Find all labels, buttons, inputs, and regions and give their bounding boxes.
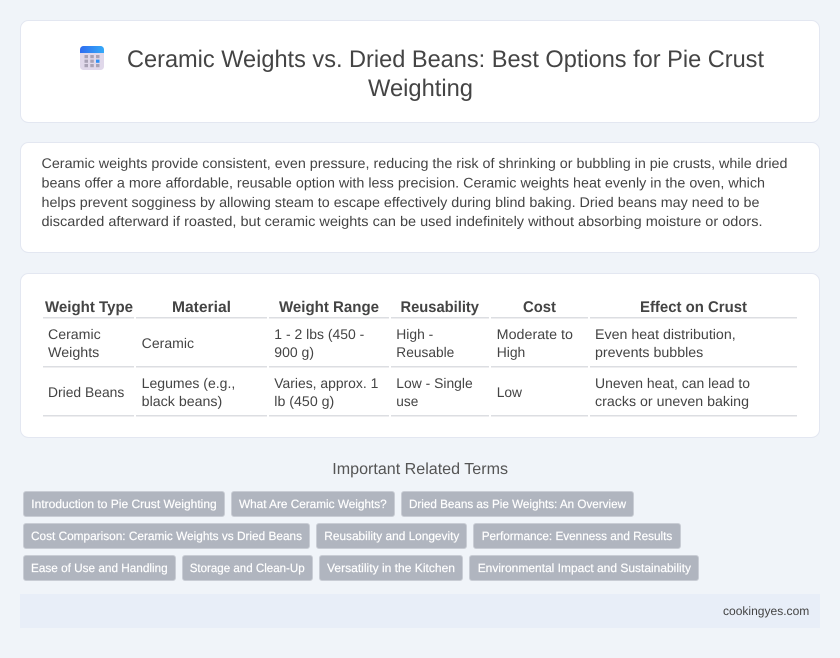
tag: Cost Comparison: Ceramic Weights vs Dried Beans	[31, 529, 302, 543]
title: Weighting	[368, 75, 473, 102]
table row: ceramic weights: Even heat distribution,	[595, 326, 736, 342]
table header row	[45, 299, 747, 316]
tag	[320, 556, 462, 580]
table row: ceramic weights: prevents bubbles	[595, 344, 703, 360]
text block: summary	[42, 155, 788, 229]
tag	[24, 524, 310, 548]
panel: title header	[20, 20, 820, 122]
table header row: Effect on Crust	[640, 299, 747, 316]
table row: dried beans: cracks or uneven baking	[595, 393, 749, 409]
table row: ceramic weights: High -	[396, 326, 434, 342]
tag: Reusability and Longevity	[324, 529, 459, 543]
table row: dried beans: Legumes (e.g.,	[142, 375, 235, 391]
tag: Environmental Impact and Sustainability	[478, 561, 691, 575]
title: Ceramic Weights vs. Dried Beans: Best Options for Pie Crust	[127, 46, 764, 73]
tag: Versatility in the Kitchen	[327, 561, 455, 575]
heading: important related terms: Important Related Terms	[332, 461, 508, 478]
table row: ceramic weights: 1 - 2 lbs (450 -	[274, 326, 365, 342]
text block: summary: beans offer a more affordable, reusable option with less precision. Ceramic weights heat evenly in the oven, which	[42, 174, 765, 190]
table header row: Reusability	[400, 299, 479, 316]
table row: dried beans: Uneven heat, can lead to	[595, 375, 750, 391]
table row: ceramic weights	[48, 326, 736, 360]
title	[127, 46, 764, 102]
footer	[20, 594, 820, 628]
text block: summary: Ceramic weights provide consistent, even pressure, reducing the risk of shrinking or bubbling in pie crusts, while dried	[42, 155, 788, 171]
table row: ceramic weights: Ceramic	[142, 335, 194, 351]
icon: calendar	[80, 46, 104, 70]
tag	[24, 556, 176, 580]
panel: related term tags	[24, 492, 698, 580]
table row: ceramic weights: Weights	[48, 344, 99, 360]
footer: cookingyes.com	[723, 604, 809, 618]
tag	[182, 556, 312, 580]
table row: ceramic weights: High	[497, 344, 525, 360]
table header row: Weight Type	[45, 299, 133, 316]
table row: ceramic weights: Ceramic	[48, 326, 101, 342]
table row: dried beans: Dried Beans	[48, 384, 124, 400]
table header row: Cost	[523, 299, 556, 316]
panel: summary paragraph	[20, 142, 820, 252]
panel: comparison table	[20, 274, 820, 438]
text block: summary: discarded afterward if roasted, but ceramic weights can be used indefinitely without absorbing moisture or odors.	[42, 213, 762, 229]
tag: Dried Beans as Pie Weights: An Overview	[409, 497, 626, 511]
table row: dried beans: lb (450 g)	[274, 393, 334, 409]
table row: dried beans: Low - Single	[396, 375, 473, 391]
table row: ceramic weights: 900 g)	[274, 344, 314, 360]
tag: What Are Ceramic Weights?	[239, 497, 387, 511]
tag	[232, 492, 394, 516]
table row: dried beans: use	[396, 393, 419, 409]
table row: dried beans: Low	[497, 384, 523, 400]
tag	[24, 492, 224, 516]
table row: ceramic weights: Moderate to	[497, 326, 573, 342]
tag	[470, 556, 698, 580]
tag	[402, 492, 634, 516]
tag: Ease of Use and Handling	[31, 561, 168, 575]
table row: dried beans: black beans)	[142, 393, 222, 409]
table row: dried beans	[48, 375, 750, 409]
tag: Introduction to Pie Crust Weighting	[31, 497, 217, 511]
table row: dried beans: Varies, approx. 1	[274, 375, 379, 391]
tag	[316, 524, 466, 548]
tag	[474, 524, 680, 548]
text block: summary: helps prevent sogginess by allowing steam to escape effectively during blind baking. Dried beans may need to be	[42, 194, 760, 210]
tag: Storage and Clean-Up	[190, 561, 305, 575]
table header row: Material	[172, 299, 231, 316]
table row: ceramic weights: Reusable	[396, 344, 455, 360]
table header row: Weight Range	[279, 299, 379, 316]
tag: Performance: Evenness and Results	[482, 529, 672, 543]
